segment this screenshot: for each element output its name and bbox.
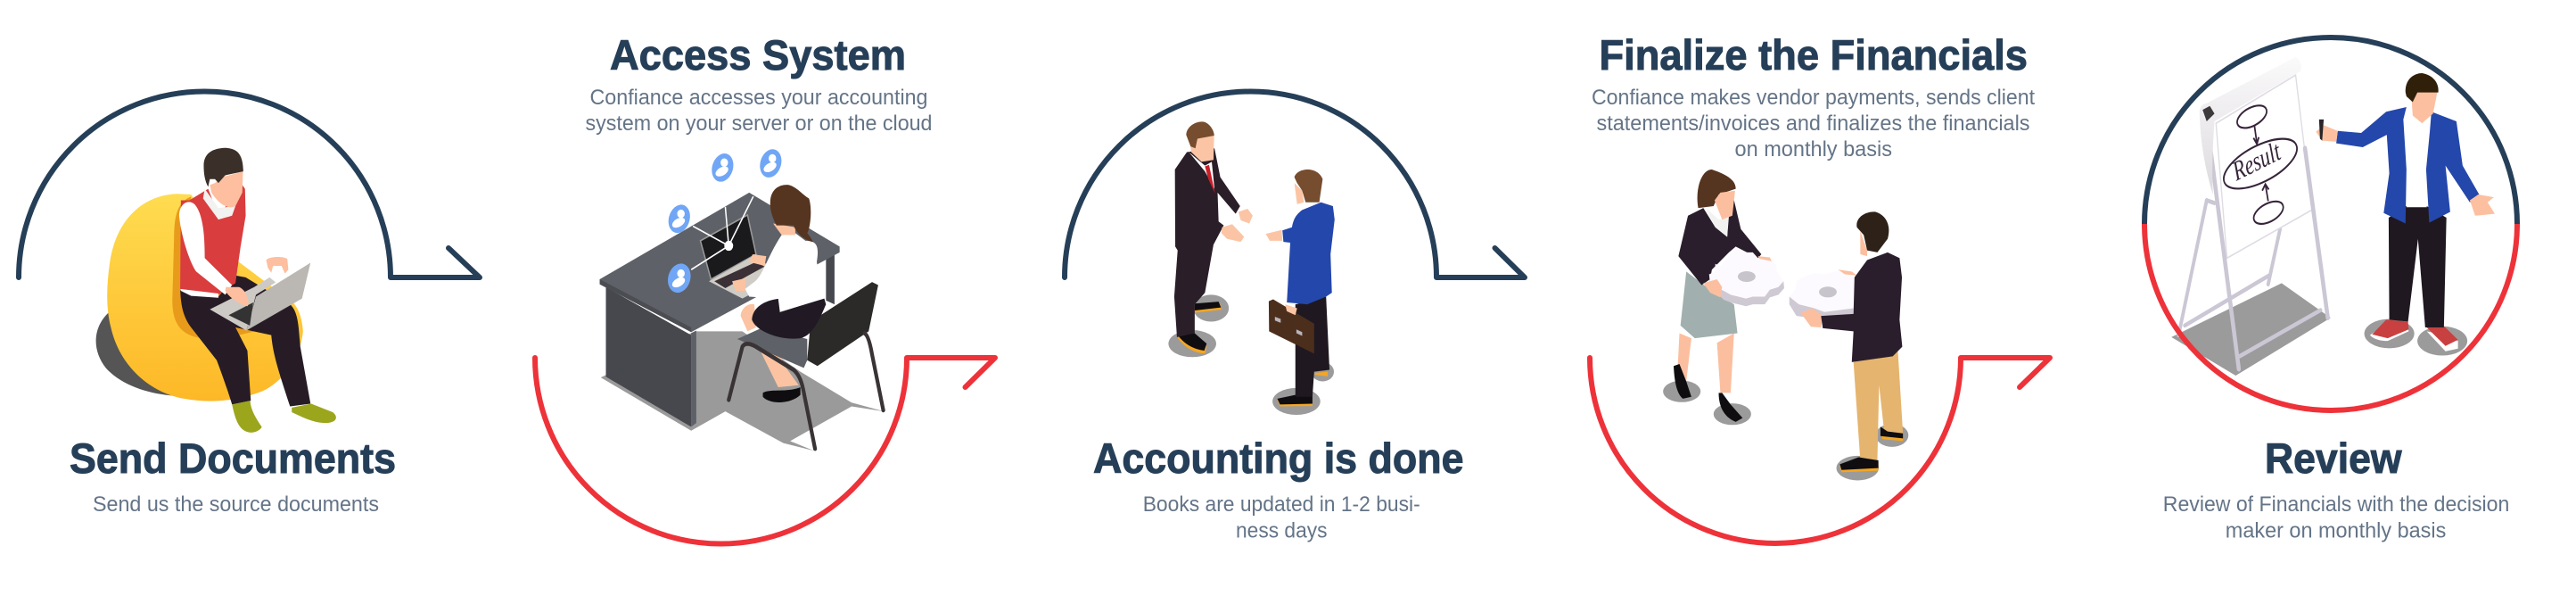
- illustration: man on bean bag with laptop: [96, 148, 336, 433]
- heading: access system: Access System: [610, 31, 906, 79]
- heading: accounting is done: Accounting is done: [1093, 434, 1464, 482]
- heading: send documents: Send Documents: [70, 434, 396, 482]
- arrow: navy arc with arrowhead 1: [19, 91, 480, 277]
- text: finalize description: on monthly basis: [1735, 137, 1892, 161]
- heading: finalize the financials: Finalize the Financials: [1600, 31, 2028, 79]
- arrow: red lower half circle: [2144, 224, 2517, 410]
- panel: step 3 accounting is done: [1065, 91, 1525, 542]
- heading: review: Review: [2265, 434, 2402, 482]
- text: accounting description: Books are updated in 1-2 busi-: [1143, 492, 1420, 517]
- illustration: two people joining gears: [1663, 170, 1908, 480]
- arrow: navy upper half circle: [2144, 37, 2517, 224]
- illustration: woman at desk with network: [600, 145, 884, 451]
- panel: step 4 finalize the financials: [1590, 31, 2050, 543]
- text: finalize description: statements/invoices and finalizes the financials: [1596, 112, 2029, 136]
- text: finalize description: [1592, 86, 2035, 161]
- arrow: red arc with arrowhead 2: [535, 358, 995, 544]
- text: send documents description: Send us the source documents: [93, 492, 379, 517]
- text: review description: Review of Financials with the decision: [2163, 492, 2509, 517]
- arrow: red arc with arrowhead 4: [1590, 358, 2050, 543]
- illustration: two men shaking hands: [1168, 121, 1335, 415]
- text: access system description: system on your server or on the cloud: [585, 112, 933, 136]
- text: review description: [2163, 492, 2509, 542]
- text: accounting description: [1143, 492, 1420, 542]
- panel: step 2 access system: [535, 31, 995, 544]
- panel: step 5 review: [2144, 37, 2517, 542]
- text: accounting description: ness days: [1236, 519, 1327, 542]
- arrow: navy arc with arrowhead 3: [1065, 91, 1525, 277]
- text: access system description: Confiance accesses your accounting: [590, 86, 927, 110]
- illustration: presenter with flip chart: [2171, 57, 2495, 376]
- text: finalize description: Confiance makes vendor payments, sends client: [1592, 86, 2035, 110]
- text: result on flip chart: Result: [2228, 137, 2284, 187]
- text: access system description: [585, 86, 933, 136]
- text: review description: maker on monthly basis: [2226, 519, 2446, 542]
- panel: step 1 send documents: [19, 91, 480, 517]
